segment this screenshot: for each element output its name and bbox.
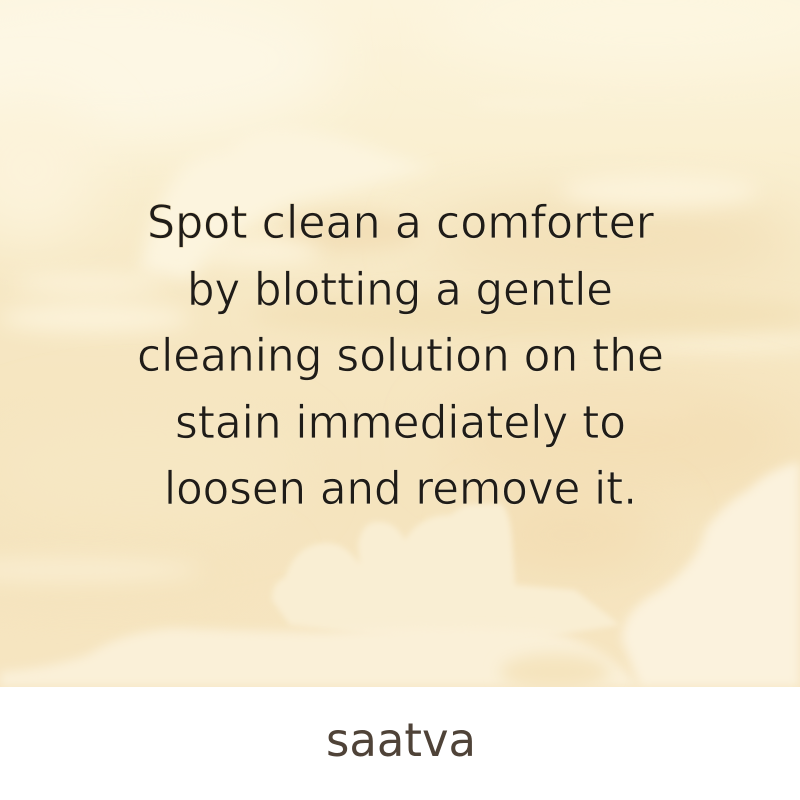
cloud: right [622,462,800,687]
main message text: stain immediately to [175,396,626,449]
main message text: Spot clean a comforter [147,196,654,249]
cloud: upper centre wisp [140,136,412,281]
main message text: loosen and remove it. [164,462,637,515]
main message text [137,196,664,515]
main message text: by blotting a gentle [187,263,613,316]
cloud: lower left bank [0,628,640,687]
main message text: cleaning solution on the [137,329,664,382]
streaks [8,173,800,354]
footer logo: saatva [0,687,800,800]
footer logo: saatva: saatva [326,713,476,767]
cloud: centre [272,503,620,640]
